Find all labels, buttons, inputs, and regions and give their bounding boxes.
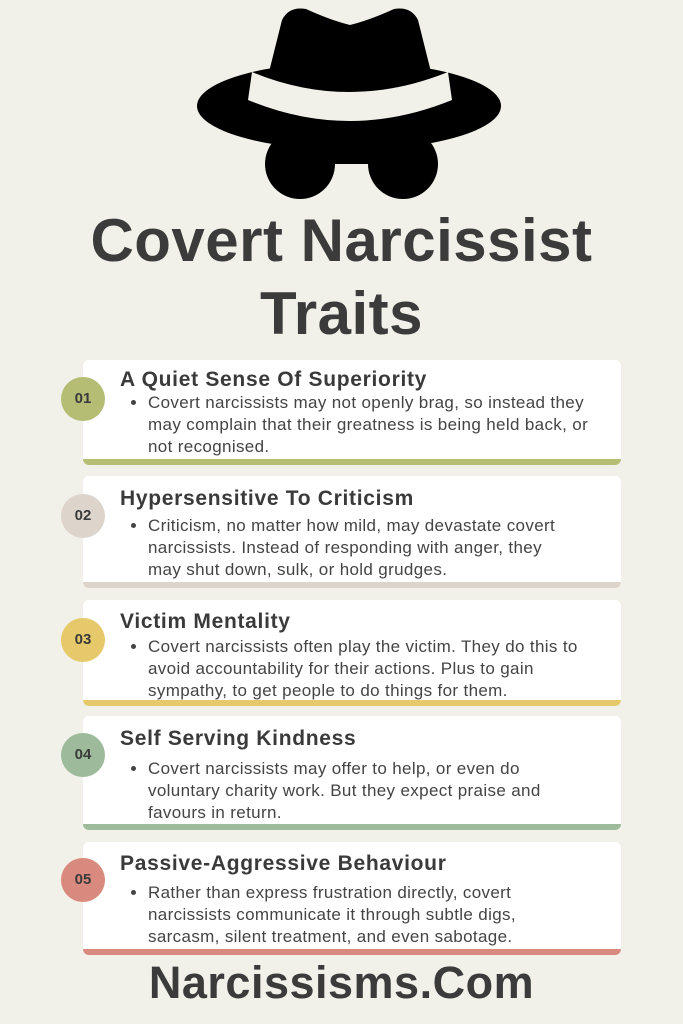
card 5	[83, 842, 621, 955]
badge 01: 01	[75, 390, 91, 407]
card 4: Self Serving Kindness	[120, 727, 356, 750]
card 5: Passive-Aggressive Behaviour	[120, 852, 447, 875]
badge 05: 05	[75, 871, 91, 888]
badge 04	[61, 733, 105, 777]
title: Traits	[260, 280, 423, 347]
badge 01	[61, 377, 105, 421]
badge 02	[61, 494, 105, 538]
card 3: Covert narcissists often play the victim. They do this to avoid accountability for their actions. Plus to gain sympathy, to get people to do things for them.	[148, 637, 578, 700]
card 1	[83, 360, 621, 465]
icon: hat and glasses	[197, 8, 501, 199]
card 5: Rather than express frustration directly, covert narcissists communicate it through subtle digs, sarcasm, silent treatment, and even sabotage.	[148, 883, 516, 946]
card 4	[83, 716, 621, 830]
card 2: Criticism, no matter how mild, may devastate covert narcissists. Instead of responding with anger, they may shut down, sulk, or hold grudges.	[148, 516, 555, 579]
card 4: Covert narcissists may offer to help, or even do voluntary charity work. But they expect praise and favours in return.	[148, 759, 541, 822]
badge 03: 03	[75, 631, 91, 648]
card 2: Hypersensitive To Criticism	[120, 487, 414, 510]
card 2	[83, 476, 621, 588]
title: Covert Narcissist	[90, 207, 593, 274]
badge 04: 04	[75, 746, 91, 763]
badge 03	[61, 618, 105, 662]
footer: Narcissisms.Com	[149, 957, 534, 1008]
badge 02: 02	[75, 507, 91, 524]
badge 05	[61, 858, 105, 902]
card 3	[83, 600, 621, 706]
card 1: A Quiet Sense Of Superiority	[120, 368, 427, 391]
title	[90, 207, 593, 347]
card 3: Victim Mentality	[120, 610, 291, 633]
card 1: Covert narcissists may not openly brag, so instead they may complain that their greatness is being held back, or not recognised.	[148, 393, 588, 456]
